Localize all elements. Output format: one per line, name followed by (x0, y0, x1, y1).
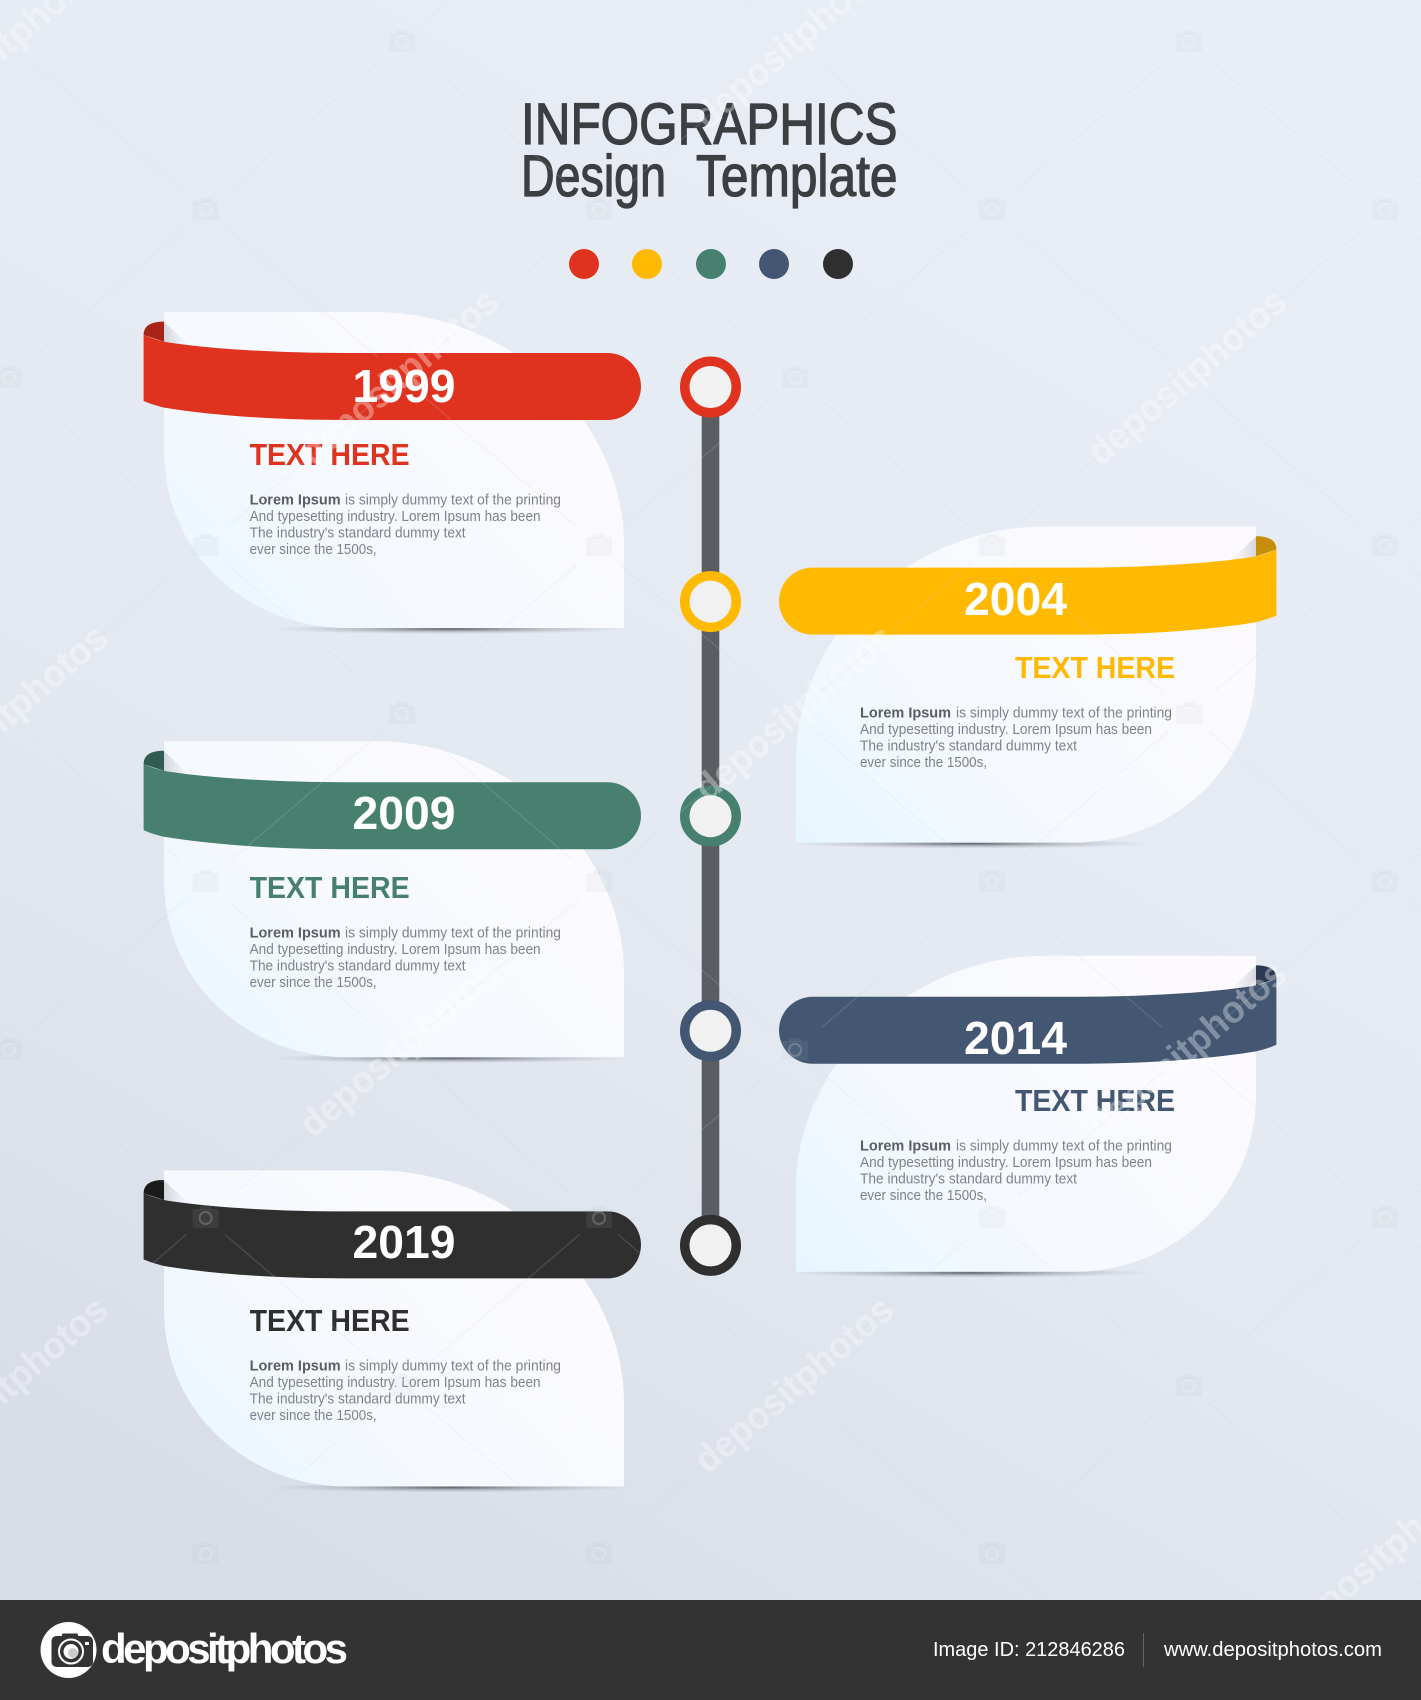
body text 1999: Lorem Ipsum (250, 492, 341, 508)
body text 2004: ever since the 1500s, (860, 755, 987, 771)
body text 2019: And typesetting industry. Lorem Ipsum has been (250, 1375, 541, 1391)
colour dots (569, 249, 853, 279)
timeline axis (702, 387, 719, 1245)
watermark text: depositphotos (687, 1289, 902, 1482)
card shape 2004 (790, 527, 1256, 849)
body text 2014: The industry's standard dummy text (860, 1172, 1077, 1188)
site url: www.depositphotos.com (1163, 1639, 1382, 1661)
heading 2014: TEXT HERE (1015, 1083, 1175, 1118)
title: Design (521, 144, 666, 209)
ribbon 2009 (144, 751, 641, 849)
heading 1999: TEXT HERE (250, 437, 410, 472)
image id: Image ID: 212846286 (933, 1639, 1125, 1661)
ribbon 2004 (779, 536, 1276, 635)
body text 2009: And typesetting industry. Lorem Ipsum has been (250, 942, 541, 958)
panel: 1999 (144, 312, 641, 634)
body text 2009 (250, 926, 561, 991)
card shape 2009 (164, 741, 630, 1063)
body text 2014: And typesetting industry. Lorem Ipsum has been (860, 1155, 1152, 1171)
body text 2009: ever since the 1500s, (250, 975, 377, 991)
panel: 2014 (779, 956, 1276, 1278)
watermark text: depositphotos (1080, 953, 1295, 1146)
timeline markers (685, 361, 736, 1271)
watermark text: depositphotos (687, 617, 902, 810)
heading 2004: TEXT HERE (1015, 650, 1175, 685)
year 2019: 2019 (352, 1216, 456, 1268)
heading 2009: TEXT HERE (250, 870, 410, 905)
card shape 2019 (164, 1170, 630, 1492)
body text 2014: ever since the 1500s, (860, 1188, 987, 1204)
body text 1999: And typesetting industry. Lorem Ipsum has been (250, 509, 541, 525)
ribbon 2014 (779, 965, 1276, 1064)
body text 2019: Lorem Ipsum (250, 1358, 341, 1374)
title: Template (696, 144, 898, 209)
panel: 2019 (144, 1170, 641, 1492)
year 2014: 2014 (964, 1012, 1067, 1064)
body text 1999 (250, 492, 561, 558)
body text 2019 (250, 1358, 561, 1424)
year 2004: 2004 (964, 573, 1067, 625)
body text 1999: ever since the 1500s, (250, 542, 377, 558)
body text 1999: is simply dummy text of the printing (345, 492, 561, 508)
body text 2014: Lorem Ipsum (860, 1138, 951, 1154)
body text 2014: is simply dummy text of the printing (956, 1138, 1172, 1154)
body text 2019: is simply dummy text of the printing (345, 1358, 561, 1374)
body text 2009: Lorem Ipsum (250, 926, 341, 942)
body text 2004 (860, 706, 1172, 771)
watermark text: depositphotos (292, 281, 507, 474)
watermark text: depositphotos (292, 953, 507, 1146)
body text 2004: The industry's standard dummy text (860, 738, 1077, 754)
watermark text: depositphotos (1080, 281, 1295, 474)
year 2009: 2009 (352, 787, 456, 839)
body text 2009: The industry's standard dummy text (250, 958, 466, 974)
title: INFOGRAPHICS (521, 92, 898, 157)
body text 2014 (860, 1138, 1172, 1204)
heading 2019: TEXT HERE (250, 1303, 410, 1338)
card shape 1999 (164, 312, 630, 634)
card shape 2014 (790, 956, 1256, 1278)
body text 2019: The industry's standard dummy text (250, 1392, 466, 1408)
ribbon 2019 (144, 1180, 641, 1278)
body text 2004: And typesetting industry. Lorem Ipsum has been (860, 722, 1152, 738)
year 1999: 1999 (352, 360, 456, 412)
body text 2009: is simply dummy text of the printing (345, 926, 561, 942)
body text 2004: is simply dummy text of the printing (956, 706, 1172, 722)
body text 2004: Lorem Ipsum (860, 706, 951, 722)
panel: 2009 (144, 741, 641, 1063)
footer bar (0, 1600, 1421, 1700)
ribbon 1999 (144, 322, 641, 420)
title (521, 92, 898, 209)
icon: camera logo (40, 1622, 96, 1678)
logo wordmark: depositphotos (101, 1625, 348, 1672)
panel: 2004 (779, 527, 1276, 849)
body text 1999: The industry's standard dummy text (250, 526, 466, 542)
body text 2019: ever since the 1500s, (250, 1408, 377, 1424)
